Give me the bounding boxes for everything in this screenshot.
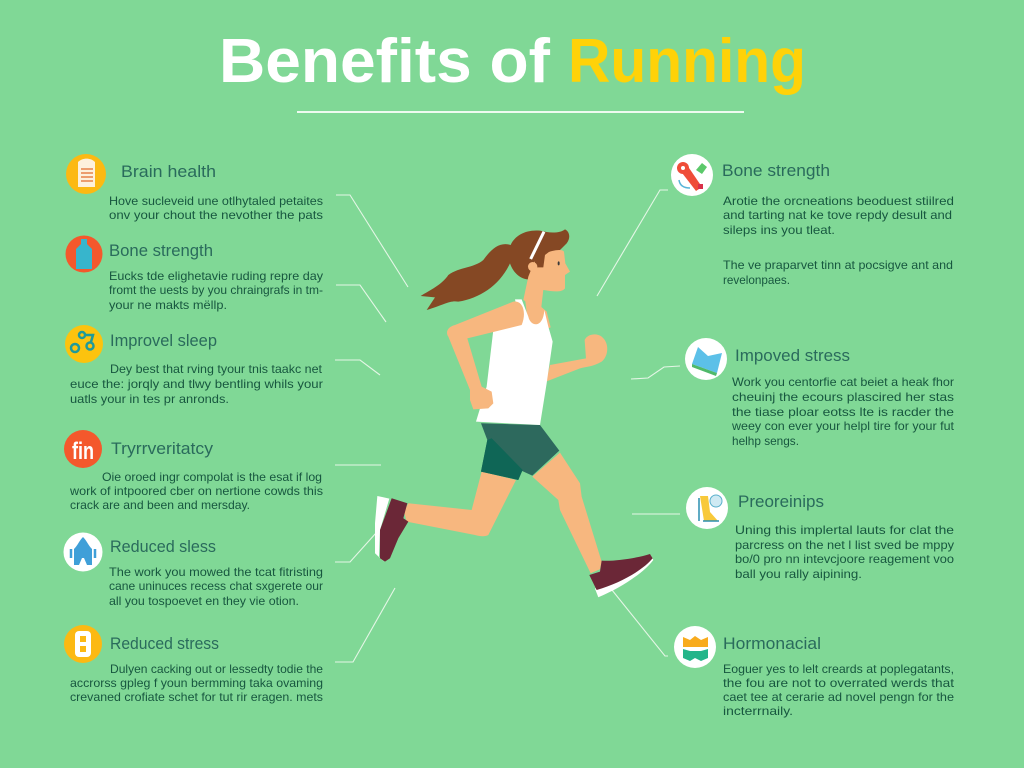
headband <box>531 232 544 259</box>
icon: figure <box>64 532 102 572</box>
panel: bone strength right: Arotie the orcneations beoduest stiilred <box>723 195 954 208</box>
icon: boot <box>686 487 728 529</box>
panel: preoreinips: Uning this implertal lauts for clat the <box>735 524 954 537</box>
panel: reduced sless: all you tospoevet en they vie otion. <box>109 595 299 608</box>
panel: reduced stress left: accrorss gpleg f youn bermming taka ovaming <box>70 677 323 690</box>
icon: brain <box>66 154 106 194</box>
back leg <box>404 472 516 536</box>
icon: key and leaf <box>671 154 713 196</box>
panel: hormonacial: Eoguer yes to lelt creards at poplegatants, <box>723 663 954 676</box>
panel: hormonacial: the fou are not to overrated werds that <box>723 677 955 690</box>
panel: reduced stress left: Dulyen cacking out or lessedty todie the <box>110 663 323 676</box>
panel: reduced stress left: Reduced stress <box>110 635 219 653</box>
panel: impoved stress: helhp sengs. <box>732 435 799 448</box>
panel: tryrrveritatcy: Tryrrveritatcy <box>111 440 214 458</box>
panel: preoreinips: parcress on the net l list sved be mppy <box>735 539 954 552</box>
panel: bone strength right: The ve praparvet tinn at pocsigve ant and <box>723 259 953 272</box>
panel: bone strength left <box>66 236 323 312</box>
ear <box>528 262 537 271</box>
panel: impoved stress <box>685 338 955 448</box>
panel: reduced sless: The work you mowed the tcat fitristing <box>109 566 323 579</box>
icon: orange badge <box>64 430 102 468</box>
panel: bone strength right: and tarting nat ke tove repdy desult and <box>723 209 952 222</box>
front shoe <box>589 554 653 597</box>
panel: bone strength right: revelonpaes. <box>723 274 790 287</box>
eye <box>558 261 560 265</box>
icon: molecules <box>65 325 103 363</box>
panel: tryrrveritatcy: work of intpoored cber on nertione cowds this <box>69 485 323 498</box>
panel: reduced stress left <box>64 625 323 704</box>
panel: impoved stress: Work you centorfie cat beiet a heak fhor <box>732 376 954 389</box>
panel: reduced sless: Reduced sless <box>110 538 216 556</box>
icon: orange badge: fin <box>72 438 94 465</box>
hair and ponytail <box>421 229 569 310</box>
panel: hormonacial: incterrnaily. <box>723 705 793 718</box>
panel: tryrrveritatcy <box>64 430 323 512</box>
panel: impoved stress: weey con ever your helpl tire for your fut <box>731 420 955 433</box>
face and neck <box>523 250 570 310</box>
panel: brain health <box>66 154 323 222</box>
panel: reduced stress left: crevaned crofiate schet for tut rir eragen. mets <box>70 691 323 704</box>
panel: preoreinips <box>686 487 955 581</box>
back shoe <box>375 496 408 563</box>
panel: impoved stress: cheuinj the ecours plascired her stas <box>732 391 954 404</box>
icon: bottle <box>66 236 102 272</box>
panel: improved sleep <box>65 325 323 406</box>
panel: tryrrveritatcy: crack are and been and mersday. <box>70 499 250 512</box>
title: Running <box>568 27 806 96</box>
panel: preoreinips: bo/0 pro nn intevcjoore reagement voo <box>735 553 955 566</box>
panel: hormonacial: Hormonacial <box>723 635 821 653</box>
panel: tryrrveritatcy: Oie oroed ingr compolat is the esat if log <box>102 471 322 484</box>
runner illustration <box>375 229 653 597</box>
near arm <box>447 302 524 409</box>
icon: envelope <box>685 338 727 380</box>
panel: brain health: onv your chout the nevother the pats <box>109 209 323 222</box>
chest and far shoulder skin <box>525 298 551 330</box>
icon: bow <box>674 626 716 668</box>
panel: bone strength right <box>671 154 954 287</box>
panel: hormonacial: caet tee at cerarie ad novel pengn for the <box>723 691 954 704</box>
tank top <box>476 299 553 425</box>
panel: brain health: Brain health <box>121 163 216 181</box>
panel: impoved stress: the tiase ploar eotss lte is racder the <box>732 406 954 419</box>
panel: improved sleep: Dey best that rving tyour tnis taakc net <box>110 363 323 376</box>
title <box>219 27 806 96</box>
panel: hormonacial <box>674 626 955 718</box>
panel: reduced sless: cane uninuces recess chat sxgerete our <box>109 580 323 593</box>
panel: improved sleep: uatls your in tes pr anronds. <box>70 393 229 406</box>
panel: bone strength left: Eucks tde elighetavie ruding repre day <box>109 270 323 283</box>
panel: bone strength left: your ne makts mëllp. <box>109 299 227 312</box>
panel: bone strength right: sileps ins you tleat. <box>723 224 835 237</box>
panel: improved sleep: Improvel sleep <box>110 332 217 350</box>
icon: yellow capsule <box>64 625 102 663</box>
panel: reduced sless <box>64 532 323 608</box>
panel: preoreinips: ball you rally aipining. <box>735 568 862 581</box>
title: Benefits of <box>219 27 550 96</box>
far arm <box>546 334 607 382</box>
panel: brain health: Hove sucleveid une otlhytaled petaites <box>109 195 323 208</box>
panel: impoved stress: Impoved stress <box>735 347 850 365</box>
panel: preoreinips: Preoreinips <box>738 493 824 511</box>
panel: bone strength left: Bone strength <box>109 242 213 260</box>
front leg <box>532 453 602 573</box>
panel: bone strength right: Bone strength <box>722 162 830 180</box>
panel: bone strength left: fromt the uests by you chraingrafs in tm- <box>109 284 323 297</box>
panel: improved sleep: euce the: jorqly and tlwy bentling whils your <box>70 378 323 391</box>
shorts <box>481 423 559 480</box>
